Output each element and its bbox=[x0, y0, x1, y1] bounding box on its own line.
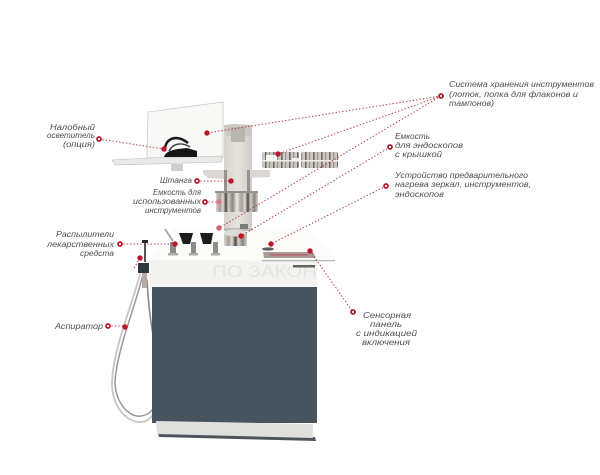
label: storage system: тампонов) bbox=[449, 98, 494, 108]
aspirator hoses bbox=[112, 274, 156, 422]
instrument tray shield bbox=[147, 102, 223, 158]
cabinet dark panel bbox=[152, 286, 317, 423]
callout dots bbox=[122, 130, 313, 330]
label: touch panel: включения bbox=[362, 337, 410, 347]
label: drug sprayers: средста bbox=[80, 248, 114, 258]
head lamp bbox=[164, 138, 197, 157]
cabinet front bbox=[150, 258, 317, 287]
label: preheating device: эндоскопов bbox=[395, 189, 445, 199]
used instruments bowls bbox=[215, 191, 258, 212]
label: endoscope container bbox=[395, 131, 464, 159]
label: endoscope container: для эндоскопов bbox=[395, 140, 464, 150]
label: touch panel bbox=[356, 310, 417, 347]
label: head lamp: (опция) bbox=[63, 139, 95, 149]
column arms bbox=[203, 170, 270, 196]
touch panel bbox=[263, 252, 316, 268]
label: storage system bbox=[449, 79, 595, 108]
aspirator unit bbox=[138, 240, 149, 288]
label: touch panel: Сенсорная bbox=[363, 310, 411, 320]
label: touch panel: панель bbox=[370, 319, 403, 329]
label: drug sprayers bbox=[46, 229, 115, 258]
label: used instruments container: Емкость для bbox=[153, 187, 201, 197]
label: preheating device: нагрева зеркал, инструментов, bbox=[395, 179, 531, 189]
drug sprayers bbox=[165, 229, 220, 256]
label: drug sprayers: лекарственных bbox=[46, 239, 115, 249]
label: drug sprayers: Распылители bbox=[56, 229, 114, 239]
cabinet base bbox=[156, 421, 316, 441]
label: storage system: Система хранения инструментов bbox=[449, 79, 595, 89]
endoscope tray bbox=[262, 152, 338, 168]
label: endoscope container: с крышкой bbox=[395, 149, 442, 159]
label: head lamp bbox=[47, 122, 95, 149]
callout leader lines bbox=[99, 96, 441, 326]
callout rings bbox=[97, 94, 443, 328]
label: preheating device: Устройство предварительного bbox=[394, 170, 528, 180]
label: used instruments container bbox=[133, 187, 202, 215]
label: storage system: (лоток, полка для флаконов и bbox=[449, 89, 578, 99]
heater slot bbox=[262, 247, 274, 251]
label: touch panel: с индикацией bbox=[356, 328, 417, 338]
column bbox=[224, 124, 252, 231]
table top bbox=[150, 228, 335, 261]
label: rod: Штанга bbox=[160, 175, 192, 185]
equipment: ENT workstation bbox=[112, 102, 338, 441]
label: used instruments container: инструментов bbox=[145, 205, 201, 215]
label: endoscope container: Емкость bbox=[395, 131, 430, 141]
label: aspirator: Аспиратор bbox=[54, 321, 103, 331]
endoscope container bbox=[224, 230, 247, 246]
watermark: ПО ЗАКОН bbox=[212, 262, 317, 281]
shelf bbox=[112, 156, 222, 171]
label: head lamp: Налобный bbox=[50, 122, 95, 132]
label: preheating device bbox=[394, 170, 531, 199]
label: used instruments container: использованных bbox=[133, 196, 202, 206]
label: head lamp: осветитель bbox=[47, 130, 95, 140]
